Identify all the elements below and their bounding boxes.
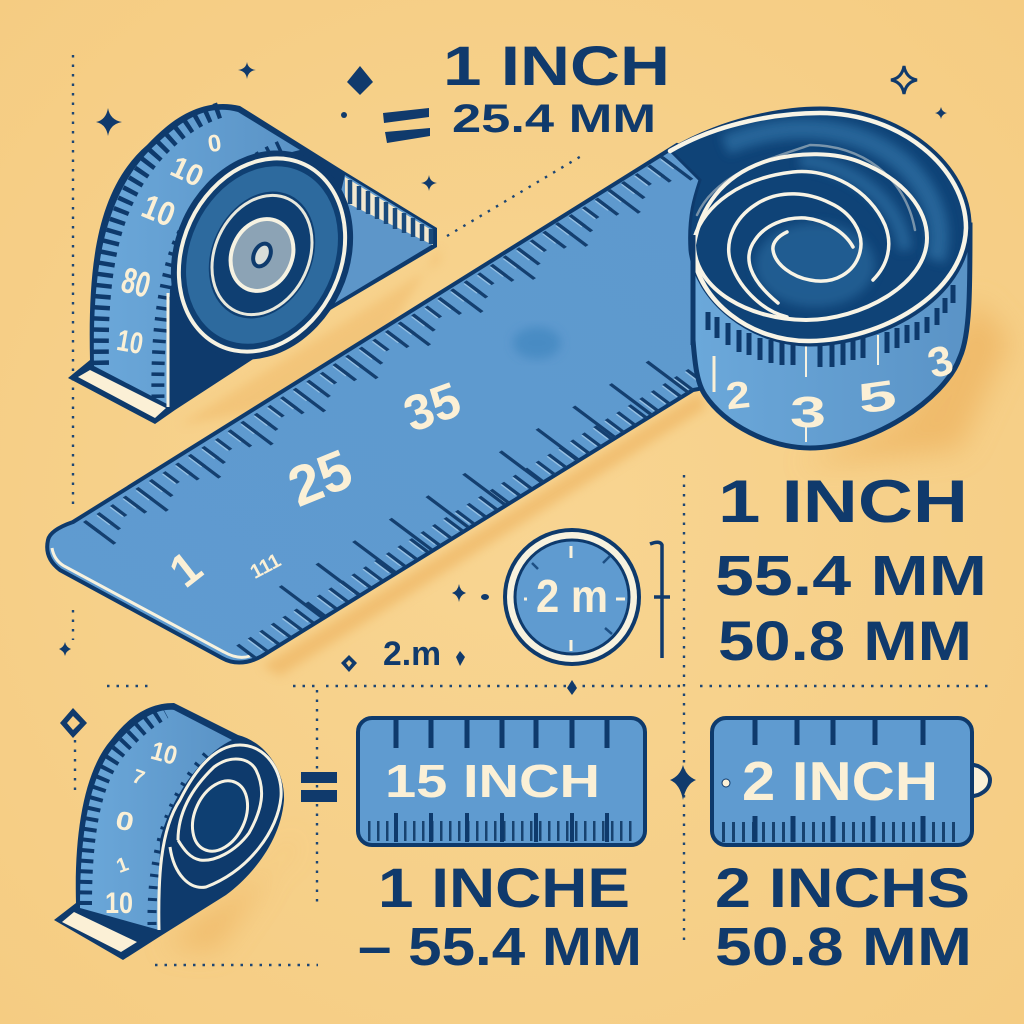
tape numbers: 111: [247, 550, 285, 584]
heading: equals 25.4 mm: [383, 97, 656, 143]
cylinder side with numbers: 3: [790, 388, 826, 437]
small roll band: 7: [129, 765, 147, 790]
text: 55.4 mm: – 55.4 MM: [358, 917, 642, 977]
tape band with numbers: 10: [165, 150, 208, 194]
icon: tape roll top left: [68, 104, 437, 424]
tape band with numbers: 0: [206, 129, 224, 158]
small roll band: 10: [148, 735, 181, 771]
small roll band: 10: [105, 887, 133, 920]
right block: conversion text: [715, 468, 987, 672]
label: 2.m: 2.m: [383, 635, 441, 673]
top edge ruler ticks: [91, 154, 690, 533]
tape numbers: 25: [279, 437, 361, 519]
right block: conversion text: 50.8 MM: [718, 609, 972, 672]
text: 50.8 mm: 50.8 MM: [715, 917, 972, 977]
tape band with numbers: 10: [114, 324, 146, 361]
spiral top face: [670, 108, 970, 345]
tape pull-out triangle: [310, 175, 433, 318]
heading: equals 25.4 mm: 25.4 MM: [452, 97, 656, 141]
cylinder side with numbers: 2: [724, 374, 752, 418]
tape numbers: 35: [396, 371, 468, 443]
dimension bracket: [650, 542, 670, 658]
cylinder side with numbers: 3: [923, 336, 958, 387]
tape numbers: [159, 371, 468, 597]
circular gauge: 2 m: [503, 528, 641, 666]
circular gauge: 2 m: 2 m: [536, 570, 608, 622]
tag: 15 inch: 15 INCH: [385, 755, 600, 807]
bottom edge ruler ticks: [233, 363, 703, 652]
small roll band: 0: [113, 804, 137, 838]
tape band with numbers: [94, 110, 300, 404]
tag: 2 inch: [712, 718, 990, 845]
spiral white lines: [670, 113, 966, 341]
icon: sparkles: [59, 62, 947, 800]
text: 2 inchs: 2 INCHS: [715, 856, 970, 919]
right block: conversion text: 55.4 MM: [715, 544, 987, 608]
right block: conversion text: 1 INCH: [718, 468, 968, 535]
small roll end tab: [62, 912, 137, 952]
tape band with numbers: 80: [117, 259, 155, 306]
tag: 15 inch: [358, 718, 645, 845]
tape numbers: 1: [159, 541, 212, 597]
large tape roll: [670, 108, 970, 448]
end tab: [78, 370, 166, 418]
small roll band: 1: [114, 853, 132, 878]
cylinder side with numbers: 5: [855, 371, 899, 423]
icon: small tape roll bottom left: [54, 703, 284, 960]
text: 1 inche: 1 INCHE: [378, 856, 630, 919]
main tape strip: [47, 145, 720, 663]
equals sign: [301, 772, 337, 802]
heading: 1 inch: 1 INCH: [443, 34, 670, 97]
small roll spiral: [159, 745, 281, 930]
tag: 2 inch: 2 INCH: [742, 750, 938, 812]
tape band with numbers: 10: [136, 187, 180, 235]
small roll band: [80, 710, 232, 930]
reel disc with rings: [138, 120, 386, 390]
cylinder side with numbers: [693, 225, 970, 448]
